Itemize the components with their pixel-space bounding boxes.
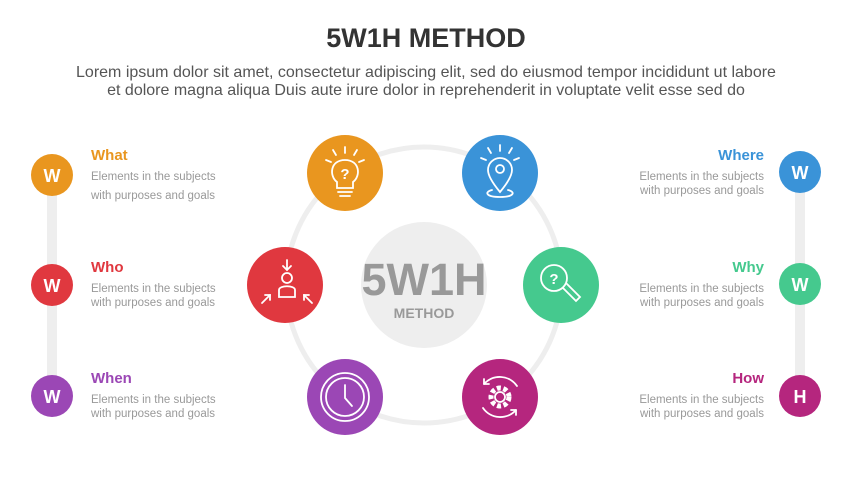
item: who: Who [91, 259, 123, 276]
ring [286, 147, 562, 423]
icon: magnifier question: ? [549, 271, 559, 288]
item: who: with purposes and goals [90, 297, 215, 309]
item: who [31, 259, 216, 309]
item: why: Why [732, 259, 765, 276]
item: what: What [91, 147, 128, 164]
icon: person with arrows [247, 247, 323, 323]
item: why: with purposes and goals [639, 297, 764, 309]
subtitle: Lorem ipsum dolor sit amet, consectetur adipiscing elit, sed do eiusmod tempor incididunt ut labore [76, 64, 776, 81]
icon: gear cycle [462, 359, 538, 435]
item: why: W [792, 275, 808, 295]
center badge: METHOD [394, 305, 454, 321]
item: when: When [91, 370, 132, 387]
item: where [639, 147, 821, 197]
item: how: with purposes and goals [639, 408, 764, 420]
subtitle: et dolore magna aliqua Duis aute irure dolor in reprehenderit in voluptate velit esse sed do [107, 82, 745, 99]
item: why: Elements in the subjects [639, 283, 764, 295]
item: how: Elements in the subjects [639, 394, 764, 406]
subtitle [76, 64, 776, 99]
item: where: Elements in the subjects [639, 171, 764, 183]
item: how: How [732, 370, 764, 387]
right timeline [639, 147, 821, 420]
item: why [639, 259, 821, 309]
icon: lightbulb: ? [340, 166, 350, 183]
icon: clock [307, 359, 383, 435]
center badge [361, 222, 487, 348]
item: when: Elements in the subjects [91, 394, 216, 406]
item: who: Elements in the subjects [91, 283, 216, 295]
item: what: Elements in the subjects [91, 171, 216, 183]
item: where: with purposes and goals [639, 185, 764, 197]
title: 5W1H METHOD [326, 23, 526, 53]
item: what: with purposes and goals [90, 190, 215, 202]
item: where: Where [718, 147, 764, 164]
item: what [31, 147, 216, 202]
item: who: W [44, 276, 60, 296]
item: how: H [794, 387, 806, 407]
item: what: W [44, 166, 60, 186]
item: how [639, 370, 821, 420]
center badge: 5W1H [361, 254, 487, 305]
icon: location pin [462, 135, 538, 211]
left timeline [31, 147, 216, 420]
icon: lightbulb [307, 135, 383, 211]
item: when: W [44, 387, 60, 407]
item: where: W [792, 163, 808, 183]
icon: magnifier question [523, 247, 599, 323]
item: when: with purposes and goals [90, 408, 215, 420]
item: when [31, 370, 216, 420]
